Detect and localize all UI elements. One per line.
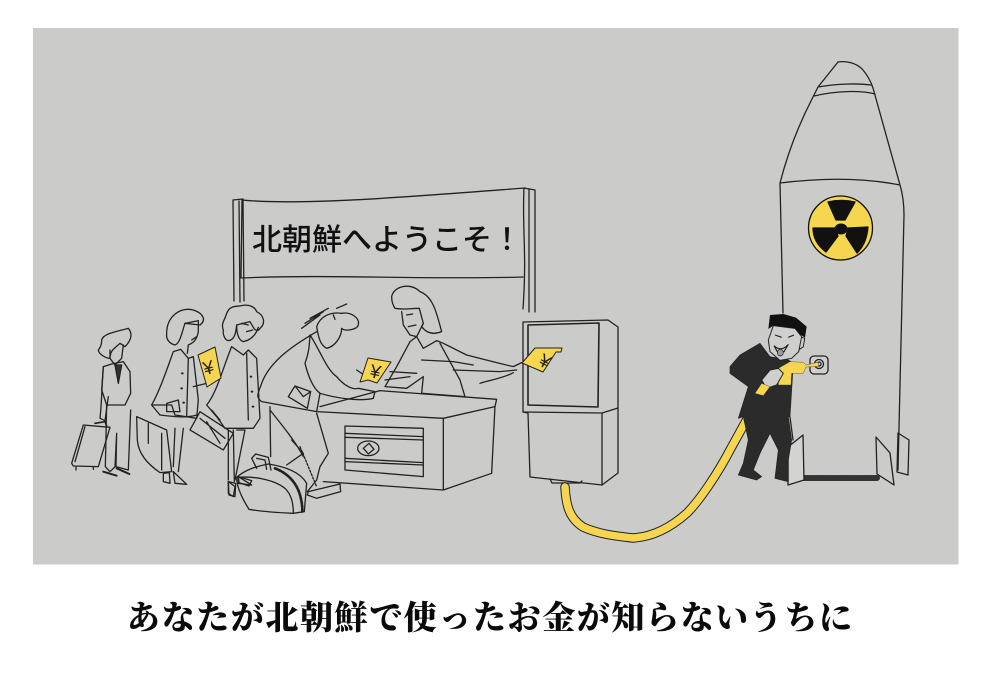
fins: [788, 433, 909, 485]
queue: boy with suitcase: [72, 328, 131, 476]
ticket handed to agent: [360, 358, 391, 384]
hand: [762, 368, 783, 388]
ticket in queue: ¥: [200, 357, 217, 380]
caption: あなたが北朝鮮で使ったお金が知らないうちに: [127, 600, 854, 637]
banner text: 北朝鮮へようこそ！: [252, 224, 522, 257]
flag on counter: [345, 426, 423, 477]
man paying at counter: [258, 304, 375, 498]
ear: [799, 337, 805, 350]
suit: [730, 343, 793, 482]
nuclear rocket: [780, 62, 909, 485]
queue: woman with ticket: [137, 309, 207, 484]
wall outlet: [810, 356, 828, 374]
fuel hose: [565, 390, 763, 538]
leader pumping: [730, 314, 818, 482]
hair: [768, 314, 807, 338]
tongue: [777, 349, 783, 356]
counter and agent: [317, 286, 522, 490]
panel: gray background: [33, 28, 958, 564]
agent: [357, 286, 522, 397]
ticket entering machine: ¥: [534, 350, 555, 374]
ticket handed to agent: ¥: [367, 361, 383, 384]
counter desk: [317, 391, 497, 490]
queue: woman with bag: [190, 305, 264, 497]
head and tool: [755, 314, 818, 396]
rocket body: [780, 62, 904, 470]
suitcase on floor: [228, 454, 307, 513]
hose collar: [755, 383, 770, 396]
ticket in queue: [198, 347, 221, 387]
nozzle: [778, 362, 818, 385]
ticket entering machine: [522, 348, 562, 374]
welcome banner: [233, 188, 535, 312]
vending machine: [523, 320, 618, 485]
rocket base: [804, 475, 877, 481]
eyes and mouth: [774, 335, 794, 352]
banner frame: [233, 188, 535, 312]
radiation symbol: [808, 196, 872, 260]
face: [768, 326, 802, 360]
